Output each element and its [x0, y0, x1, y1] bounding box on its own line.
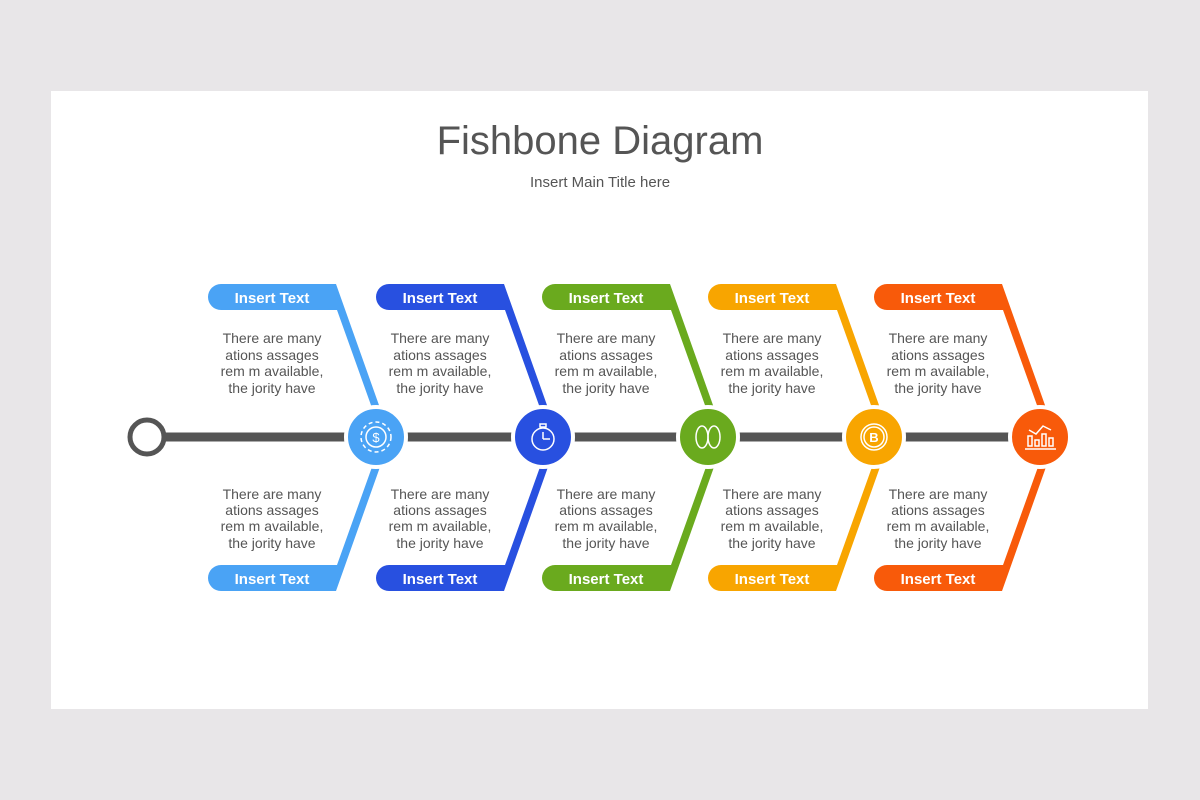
panel: slide card — [51, 91, 1148, 709]
branch 5: red-orange: There are many — [889, 486, 987, 502]
branch 5: red-orange: the jority have — [894, 380, 982, 396]
branch 4: orange-yellow: There are many — [723, 330, 821, 346]
branch 3: green: There are many — [557, 330, 655, 346]
branch 1: blue: the jority have — [228, 380, 316, 396]
branch 4: orange-yellow: Insert Text — [735, 290, 809, 307]
branch 1: blue: There are many — [223, 330, 321, 346]
branch 4: orange-yellow: the jority have — [728, 535, 816, 551]
branch 1: blue: ations assages — [225, 502, 319, 518]
branch 2: dark blue — [376, 284, 573, 591]
branch 4: orange-yellow: rem m available, — [721, 363, 823, 379]
subtitle: Insert Main Title here — [530, 174, 670, 191]
branch 2: dark blue: rem m available, — [389, 363, 491, 379]
branch 5: red-orange: Insert Text — [901, 571, 975, 588]
branch 1: blue: ations assages — [225, 347, 319, 363]
branch 3: green: rem m available, — [555, 363, 657, 379]
branch 4: orange-yellow: There are many — [723, 486, 821, 502]
branch 1: blue: rem m available, — [221, 518, 323, 534]
branch 2: dark blue: the jority have — [396, 535, 484, 551]
branch 4: orange-yellow — [708, 284, 904, 591]
branch 5: red-orange: rem m available, — [887, 518, 989, 534]
branch 5: red-orange — [874, 284, 1070, 591]
branch 2: dark blue: There are many — [391, 330, 489, 346]
branch 3: green: ations assages — [559, 347, 653, 363]
branch 3: green: the jority have — [562, 380, 650, 396]
branch 2: dark blue: Insert Text — [403, 571, 477, 588]
title: Fishbone Diagram — [437, 119, 763, 163]
branch 4: orange-yellow: Insert Text — [735, 571, 809, 588]
branch 3: green: the jority have — [562, 535, 650, 551]
branch 1: blue: the jority have — [228, 535, 316, 551]
branch 3: green: ations assages — [559, 502, 653, 518]
branch 5: red-orange: ations assages — [891, 347, 985, 363]
branch 1: blue — [208, 284, 406, 591]
branch 3: green: There are many — [557, 486, 655, 502]
branch 3: green: Insert Text — [569, 571, 643, 588]
branch 1: blue: Insert Text — [235, 290, 309, 307]
branch 1: blue: rem m available, — [221, 363, 323, 379]
branch 2: dark blue: the jority have — [396, 380, 484, 396]
branch 5: red-orange: Insert Text — [901, 290, 975, 307]
branch 2: dark blue: Insert Text — [403, 290, 477, 307]
branch 4: orange-yellow: rem m available, — [721, 518, 823, 534]
branch 1: blue: Insert Text — [235, 571, 309, 588]
branch 5: red-orange: There are many — [889, 330, 987, 346]
branch 5: red-orange: rem m available, — [887, 363, 989, 379]
branch 5: red-orange: the jority have — [894, 535, 982, 551]
branch 3: green: Insert Text — [569, 290, 643, 307]
branch 1: blue: There are many — [223, 486, 321, 502]
branch 4: orange-yellow: B — [869, 430, 879, 445]
branch 2: dark blue: rem m available, — [389, 518, 491, 534]
branch 2: dark blue: There are many — [391, 486, 489, 502]
branch 5: red-orange: ations assages — [891, 502, 985, 518]
branch 3: green — [542, 284, 738, 591]
branch 1: blue: $ — [372, 430, 380, 445]
spine — [130, 420, 1020, 454]
branch 2: dark blue: ations assages — [393, 347, 487, 363]
branch 4: orange-yellow: ations assages — [725, 347, 819, 363]
branch 2: dark blue: ations assages — [393, 502, 487, 518]
branch 4: orange-yellow: ations assages — [725, 502, 819, 518]
branch 3: green: rem m available, — [555, 518, 657, 534]
branch 4: orange-yellow: the jority have — [728, 380, 816, 396]
